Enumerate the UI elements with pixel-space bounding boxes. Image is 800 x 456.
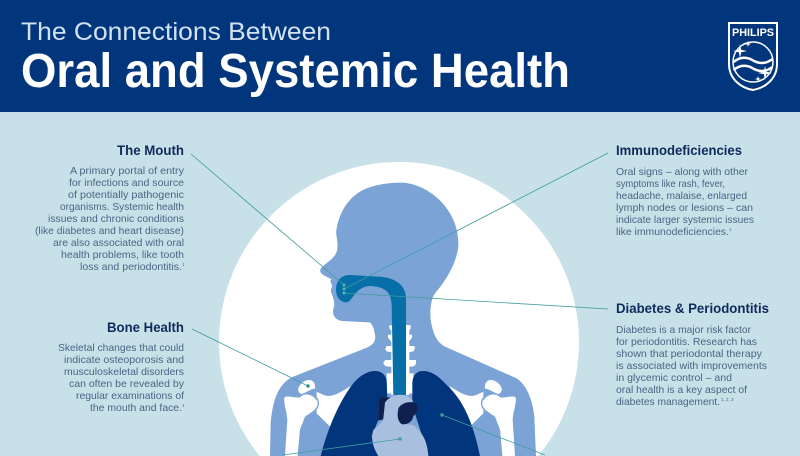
background circle [219, 162, 579, 456]
panel: diabetes and periodontitis [616, 301, 769, 408]
right lung [412, 371, 480, 456]
leader line: diabetes [342, 292, 608, 309]
heart [372, 395, 428, 456]
anatomy figure [270, 183, 536, 456]
body text: (like diabetes and heart disease) [35, 226, 184, 237]
body text: in glycemic control – and [616, 373, 732, 384]
arm muscle [298, 412, 328, 456]
header band [0, 0, 800, 112]
clavicle blob [485, 380, 502, 394]
icon: Philips shield logo [729, 23, 777, 90]
body text: indicate osteoporosis and [64, 355, 184, 366]
icon: Philips shield logo: PHILIPS [732, 27, 774, 39]
body text [35, 166, 185, 273]
leader line: lungs [440, 413, 545, 455]
body text [616, 325, 767, 408]
body text: regular examinations of [76, 391, 184, 402]
panel: immunodeficiencies [616, 143, 754, 238]
body text: lymph nodes or lesions – can [616, 203, 753, 214]
gap between arm and ribcage [449, 386, 483, 427]
body text: 1 [182, 262, 185, 267]
panel: the mouth [35, 143, 185, 273]
body text: musculoskeletal disorders [64, 367, 184, 378]
body text: health problems, like tooth [61, 250, 184, 261]
body text: for periodontitis. Research has [616, 337, 757, 348]
right shoulder bones [449, 380, 516, 456]
heading: Bone Health [107, 320, 184, 335]
body text: Diabetes is a major risk factor [616, 325, 752, 336]
title: main heading: Oral and Systemic Health [21, 45, 570, 98]
joint ring [300, 394, 318, 414]
body text: for infections and source [69, 178, 184, 189]
gap between arm and ribcage [317, 386, 351, 427]
trachea and oral cavity [336, 275, 406, 395]
humerus [284, 395, 317, 456]
dark vessel right [398, 402, 417, 424]
left lung [321, 371, 387, 456]
heading: The Mouth [117, 143, 184, 158]
leader line: the mouth [191, 154, 346, 286]
body text: of potentially pathogenic [68, 190, 184, 201]
humerus [483, 395, 516, 456]
title: kicker: The Connections Between [21, 18, 331, 46]
leader line: bone health [192, 329, 310, 388]
heading: Immunodeficiencies [616, 143, 742, 158]
arm muscle [472, 412, 502, 456]
body text: diabetes management. [616, 397, 720, 408]
leader line: heart [283, 437, 402, 455]
body text: loss and periodontitis. [80, 262, 182, 273]
heading: Diabetes & Periodontitis [616, 301, 769, 316]
body text: can often be revealed by [69, 379, 185, 390]
body text: organisms. Systemic health [60, 202, 184, 213]
body text [58, 343, 185, 414]
panel: bone health [58, 320, 185, 414]
body text: issues and chronic conditions [48, 214, 184, 225]
body text: like immunodeficiencies. [616, 227, 729, 238]
body text: Oral signs – along with other [616, 167, 749, 178]
body text: symptoms like rash, fever, [616, 179, 725, 190]
body text: indicate larger systemic issues [616, 215, 754, 226]
body text: A primary portal of entry [70, 166, 185, 177]
clavicle blob [298, 380, 315, 394]
body text: 1 [729, 227, 732, 232]
body text: 1, 2, 3 [721, 397, 734, 402]
joint ring [482, 394, 500, 414]
body text: the mouth and face. [90, 403, 182, 414]
body silhouette [270, 183, 536, 456]
body text: Skeletal changes that could [58, 343, 184, 354]
body text: shown that periodontal therapy [616, 349, 763, 360]
body text: is associated with improvements [616, 361, 767, 372]
body text: 1 [182, 403, 185, 408]
body text: headache, malaise, enlarged [616, 191, 747, 202]
leader line: immunodeficiencies [342, 153, 608, 290]
body text: are also associated with oral [53, 238, 184, 249]
spine [383, 325, 416, 395]
dark vessel left [378, 397, 391, 421]
body text: oral health is a key aspect of [616, 385, 747, 396]
body text [616, 167, 754, 238]
left shoulder bones [284, 380, 351, 456]
